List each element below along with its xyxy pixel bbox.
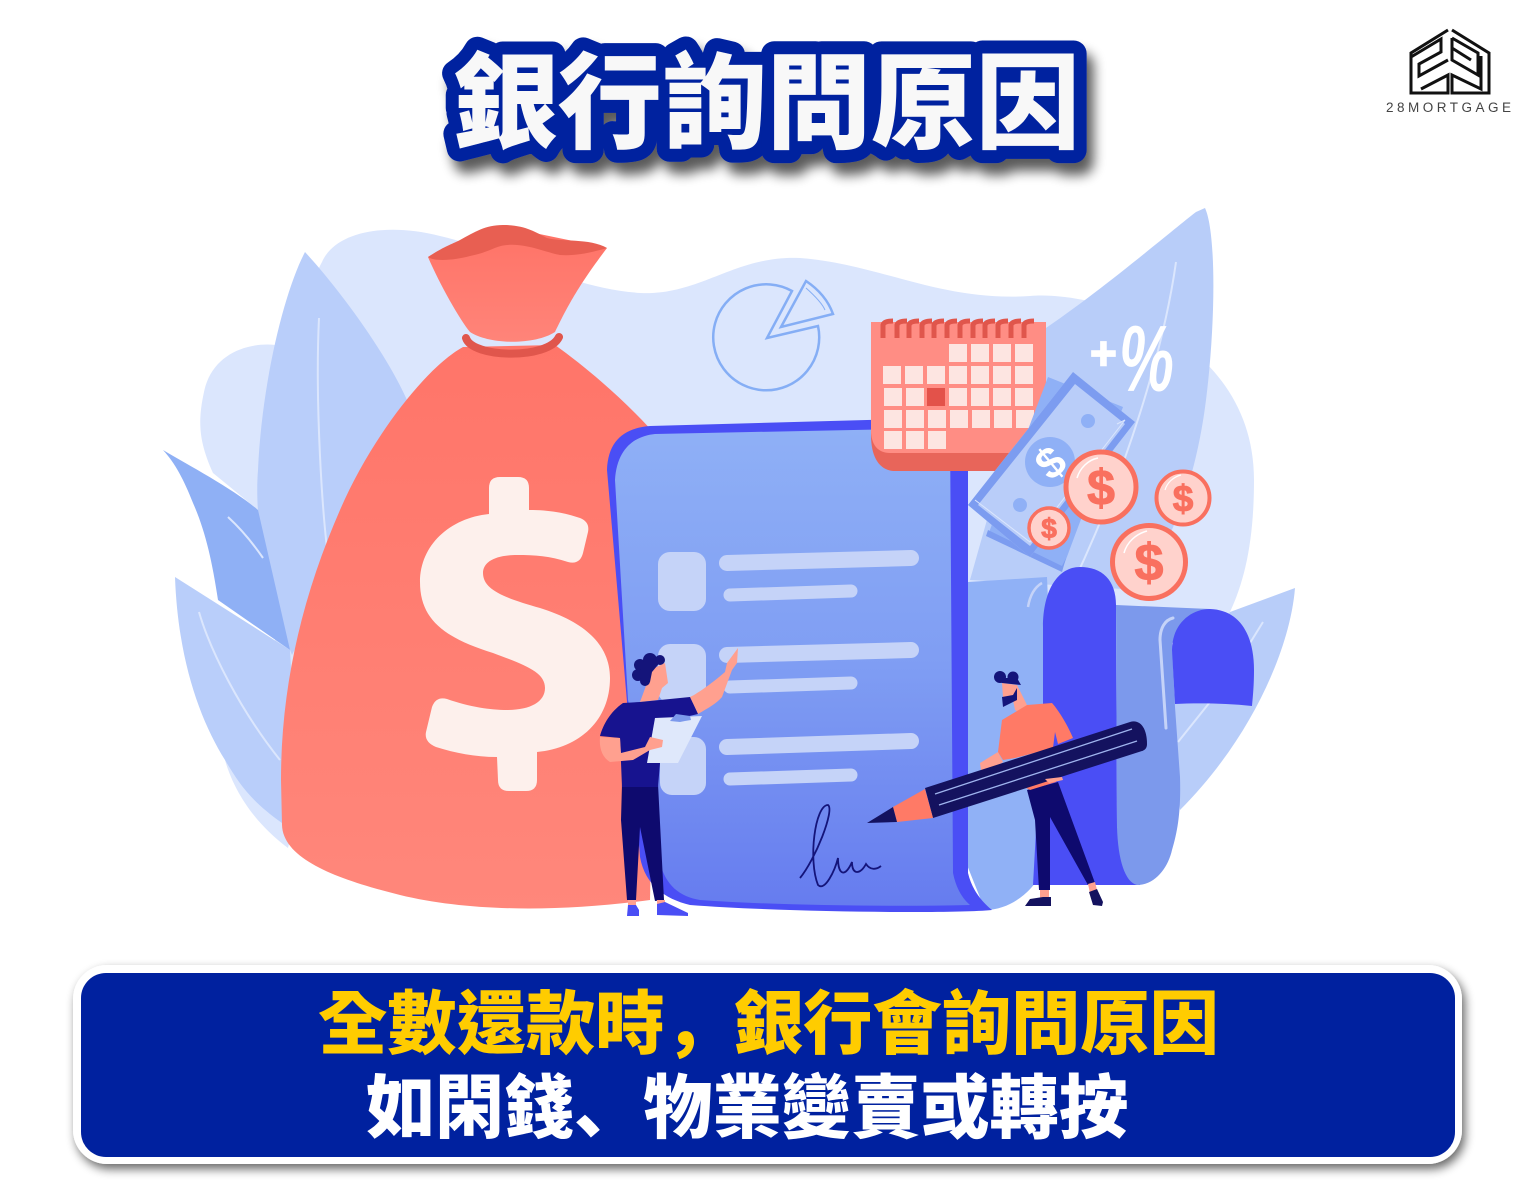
pencil highlight lines (935, 729, 1137, 805)
logo: 28MORTGAGE (1386, 30, 1515, 115)
calendar rings (883, 321, 1034, 338)
pants (1027, 782, 1095, 890)
small left leaf (163, 450, 290, 650)
neck and face (640, 663, 668, 702)
paper face (615, 428, 970, 906)
lower left leaf (175, 577, 300, 830)
raised arm (690, 648, 738, 714)
checklist rows (658, 552, 706, 795)
tall roll (1033, 567, 1140, 885)
illustration: coins (1029, 452, 1210, 598)
highlighted day (927, 388, 945, 406)
illustration: banknotes: $ (1026, 437, 1076, 490)
banner line 2: 如閑錢、物業變賣或轉按 (366, 1052, 1128, 1152)
illustration: coins: $ (1135, 534, 1164, 592)
bag neck (428, 230, 607, 342)
illustration: background blob and leaves (163, 208, 1295, 848)
shoes (627, 902, 688, 916)
clipboard (647, 716, 702, 763)
calendar grid (883, 344, 1034, 449)
ankles (1040, 882, 1097, 898)
hair (632, 653, 665, 686)
illustration: percent symbol (1090, 306, 1174, 411)
orange shirt (998, 703, 1073, 760)
illustration: percent symbol: + (1090, 327, 1117, 379)
ankles (628, 900, 665, 906)
scroll back sheet (1116, 605, 1210, 885)
neck and face (1002, 683, 1027, 713)
illustration: coins: $ (1041, 513, 1057, 544)
lower pale leaf (225, 760, 300, 848)
shirt hem (1026, 777, 1058, 790)
signature (800, 805, 881, 886)
pencil tip (867, 807, 897, 823)
banner box (81, 973, 1455, 1157)
big left leaf (257, 252, 412, 655)
pencil wood (893, 789, 933, 822)
bag tie (466, 337, 559, 354)
bottom banner (73, 965, 1462, 1164)
illustration: coins: $ (1173, 478, 1194, 519)
shirt (600, 697, 698, 787)
title: 銀行詢問原因 (453, 46, 1080, 163)
left arm (600, 737, 663, 762)
illustration: money bag (281, 225, 660, 908)
shoes (1025, 889, 1103, 906)
big right leaf (970, 208, 1213, 590)
sheet highlight (1160, 618, 1173, 728)
pants (621, 784, 664, 901)
illustration: person with clipboard (600, 648, 738, 916)
right hand (1045, 777, 1063, 783)
hair and beard (994, 671, 1021, 707)
pencil barrel (925, 721, 1147, 818)
illustration: coins: $ (1087, 460, 1115, 516)
illustration: percent symbol: % (1119, 306, 1174, 411)
scroll back strip (965, 577, 1060, 910)
roll end (1172, 609, 1254, 706)
bag rim (428, 225, 607, 260)
illustration: banknotes (968, 372, 1135, 572)
banner line 1: 全數還款時，銀行會詢問原因 (318, 968, 1219, 1068)
clipboard clip (670, 714, 691, 722)
checklist lines (727, 558, 911, 779)
banner border (73, 965, 1462, 1164)
logo: 28MORTGAGE: 28MORTGAGE (1386, 100, 1515, 115)
illustration: pie chart outline (713, 281, 833, 390)
illustration: scroll document (607, 419, 1254, 912)
lower right leaf (1170, 588, 1295, 810)
dollar sign on bag (420, 477, 610, 791)
illustration: person holding pencil (867, 671, 1147, 906)
left hand (980, 752, 1003, 772)
illustration: calendar (871, 321, 1046, 471)
paper outline (607, 419, 992, 912)
